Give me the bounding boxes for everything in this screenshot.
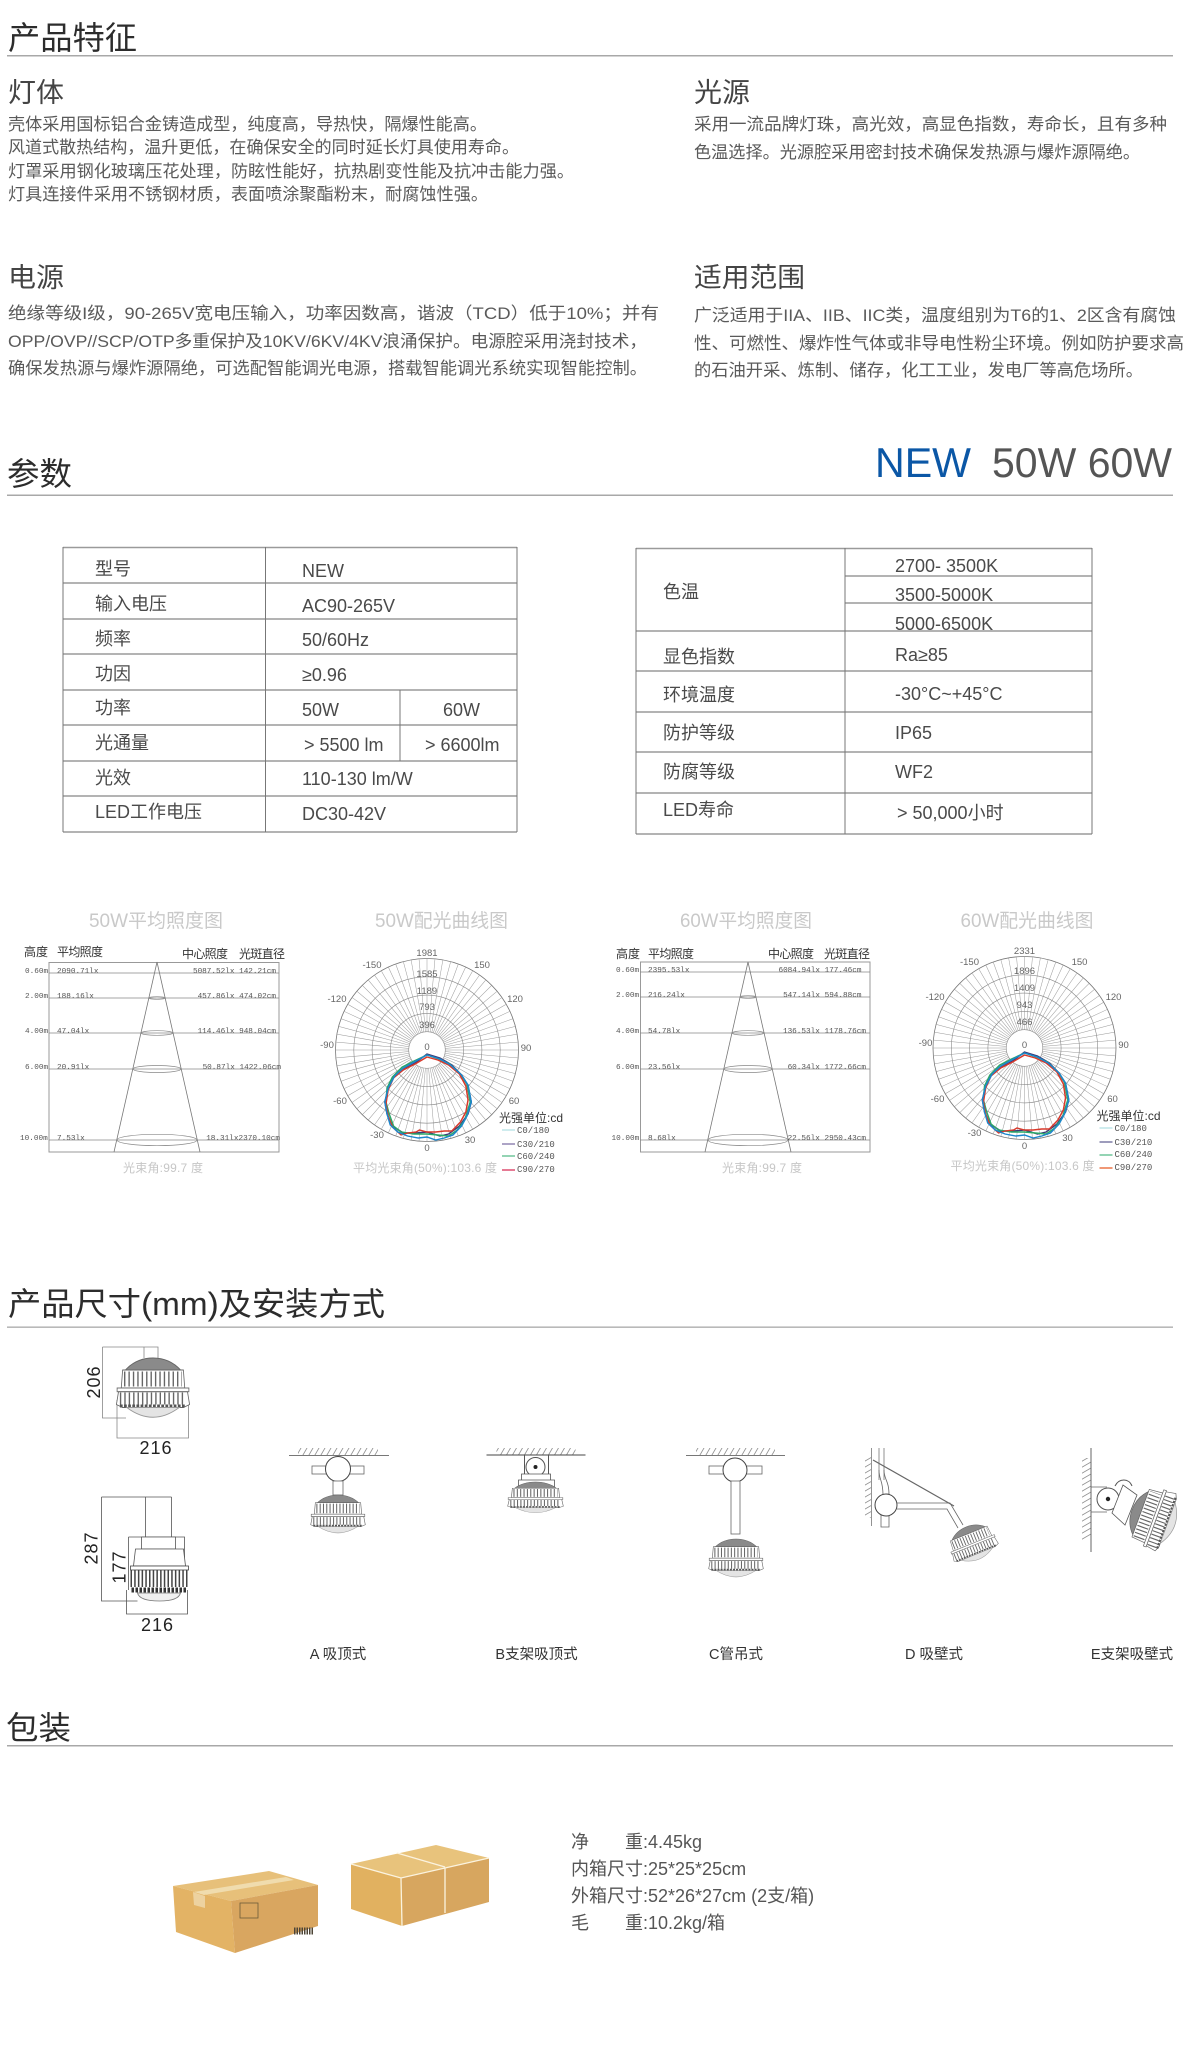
chart: 50W average illuminance <box>20 910 285 1175</box>
chart: 60W light distribution curve <box>919 910 1161 1173</box>
chart: 50W average illuminance: 7.53lx <box>57 1135 85 1143</box>
table: right parameters: 2700- 3500K <box>895 556 998 576</box>
text block: light source: 采用一流品牌灯珠，高光效，高显色指数，寿命长，且有多种 <box>694 115 1167 134</box>
installation A: ceiling mount: A 吸顶式 <box>310 1646 367 1663</box>
text block: lamp body: 壳体采用国标铝合金铸造成型，纯度高，导热快，隔爆性能高。 <box>8 115 487 134</box>
table: left parameters: LED工作电压 <box>95 802 202 822</box>
text block: packaging specifications: 重:4.45kg <box>625 1832 702 1852</box>
chart: 50W average illuminance: 188.16lx <box>57 993 94 1001</box>
chart: 50W light distribution curve: -30 <box>370 1130 384 1141</box>
chart: 60W light distribution curve: 150 <box>1072 957 1087 968</box>
chart: 60W light distribution curve: C90/270 <box>1114 1163 1152 1173</box>
table: left parameters: 50W <box>302 700 339 720</box>
chart: 60W light distribution curve: -120 <box>925 992 945 1003</box>
text block: packaging specifications <box>571 1832 814 1933</box>
icon: sealed cardboard box <box>351 1845 489 1926</box>
table: right parameters: 3500-5000K <box>895 585 993 605</box>
chart: 50W light distribution curve: 60 <box>509 1096 519 1107</box>
chart: 50W average illuminance: 2.00m <box>25 993 48 1001</box>
chart: 60W average illuminance: 60.34lx 1772.66cm <box>788 1064 866 1072</box>
dimension drawing: pendant lamp 287 x 177 x 216: 216 <box>141 1615 174 1635</box>
chart: 50W average illuminance: 10.00m <box>20 1135 48 1143</box>
text block: packaging specifications: 内箱尺寸:25*25*25cm <box>571 1859 746 1879</box>
table: right parameters: 环境温度 <box>663 685 735 705</box>
installation A: ceiling mount <box>289 1448 389 1663</box>
chart: 60W light distribution curve: 平均光束角(50%):103.6 度 <box>950 1158 1094 1173</box>
chart: 50W average illuminance: 18.31lx2370.10cm <box>206 1135 280 1143</box>
installation E: bracket wall mount: E支架吸壁式 <box>1091 1646 1174 1663</box>
chart: 60W average illuminance: 光束角:99.7 度 <box>722 1160 802 1175</box>
chart: 60W average illuminance <box>612 910 870 1175</box>
table: left parameters: ≥0.96 <box>302 665 347 685</box>
chart: 50W light distribution curve: -90 <box>320 1040 334 1051</box>
chart: 60W average illuminance: 4.00m <box>616 1028 639 1036</box>
chart: 50W average illuminance: 光斑直径 <box>239 947 285 961</box>
chart: 50W light distribution curve: C90/270 <box>517 1165 555 1175</box>
table: right parameters: 色温 <box>663 582 699 602</box>
dimension drawing: ceiling lamp 206 x 216 <box>84 1347 190 1458</box>
chart: 60W average illuminance: 547.14lx 594.88cm <box>783 992 862 1000</box>
table: right parameters: 防腐等级 <box>663 762 735 782</box>
chart: 60W light distribution curve: 0 <box>1022 1141 1027 1152</box>
icon: cardboard box with tape <box>173 1871 318 1953</box>
chart: 60W average illuminance: 54.78lx <box>648 1028 681 1036</box>
chart: 50W average illuminance: 2090.71lx <box>57 968 99 976</box>
chart: 60W average illuminance: 中心照度 <box>768 946 814 961</box>
text block: lamp body: 灯体 <box>8 78 64 108</box>
chart: 50W light distribution curve: 150 <box>474 960 490 971</box>
chart: 60W average illuminance: 10.00m <box>612 1135 640 1143</box>
chart: 60W light distribution curve: -60 <box>931 1094 944 1105</box>
table: left parameters: 110-130 lm/W <box>302 769 413 789</box>
chart: 60W average illuminance: 60W平均照度图 <box>680 910 812 932</box>
model label: NEW: NEW <box>875 439 971 486</box>
table: left parameters: 功因 <box>95 664 131 684</box>
text block: lamp body <box>8 78 574 204</box>
chart: 50W average illuminance: 457.86lx 474.02cm <box>198 993 276 1001</box>
chart: 60W light distribution curve: 30 <box>1062 1133 1073 1144</box>
chart: 50W average illuminance: 高度 <box>24 944 48 959</box>
installation D: wall mount <box>865 1448 1001 1663</box>
table: right parameters: 防护等级 <box>663 723 735 743</box>
table: right parameters <box>636 548 1092 834</box>
text block: power supply: 确保发热源与爆炸源隔绝，可选配智能调光电源，搭载智能调光系统实现智能控制。 <box>8 359 647 378</box>
chart: 60W light distribution curve: 60W配光曲线图 <box>960 910 1094 932</box>
chart: 50W light distribution curve: -150 <box>362 960 382 971</box>
table: right parameters: WF2 <box>895 762 933 782</box>
chart: 60W light distribution curve: -90 <box>919 1038 932 1049</box>
chart: 60W light distribution curve: 466 <box>1017 1017 1032 1028</box>
chart: 50W light distribution curve: C0/180 <box>517 1126 549 1136</box>
chart: 50W average illuminance: 平均照度 <box>57 944 103 959</box>
chart: 60W average illuminance: 平均照度 <box>648 946 694 961</box>
chart: 60W light distribution curve: 1896 <box>1014 966 1035 977</box>
chart: 50W average illuminance: 4.00m <box>25 1028 48 1036</box>
text block: application scope: 广泛适用于IIA、IIB、IIC类，温度组别为T6的1、2区含有腐蚀 <box>694 306 1176 325</box>
text block: light source <box>694 78 1167 162</box>
chart: 60W light distribution curve: -150 <box>960 957 979 968</box>
chart: 50W light distribution curve: -120 <box>327 994 347 1005</box>
chart: 50W light distribution curve: 1189 <box>417 986 437 997</box>
chart: 60W average illuminance: 22.56lx 2950.43cm <box>788 1135 866 1143</box>
table: left parameters: 光通量 <box>95 733 149 753</box>
chart: 60W light distribution curve: 60 <box>1107 1094 1118 1105</box>
heading: packaging: 包装 <box>6 1710 71 1746</box>
chart: 60W light distribution curve: 90 <box>1118 1040 1129 1051</box>
dimension drawing: ceiling lamp 206 x 216: 206 <box>84 1365 104 1399</box>
heading: parameters: 参数 <box>7 456 72 492</box>
text block: application scope: 性、可燃性、爆炸性气体或非导电性粉尘环境。例如防护要求高 <box>694 334 1184 353</box>
table: left parameters: 功率 <box>95 698 131 718</box>
table: right parameters: Ra≥85 <box>895 645 948 665</box>
chart: 50W average illuminance: 50W平均照度图 <box>89 910 223 932</box>
chart: 60W light distribution curve: 120 <box>1106 992 1121 1003</box>
dimension drawing: pendant lamp 287 x 177 x 216: 287 <box>82 1531 102 1565</box>
chart: 60W light distribution curve: 1409 <box>1014 983 1035 994</box>
chart: 60W average illuminance: 高度 <box>616 946 640 961</box>
chart: 50W average illuminance: 中心照度 <box>182 946 228 961</box>
table: left parameters: 50/60Hz <box>302 630 369 650</box>
installation B: bracket ceiling mount <box>486 1448 586 1663</box>
section: parameters <box>7 439 1173 834</box>
table: left parameters: NEW <box>302 561 344 581</box>
text block: power supply <box>8 263 659 378</box>
text block: lamp body: 灯具连接件采用不锈钢材质，表面喷涂聚酯粉末，耐腐蚀性强。 <box>8 185 488 204</box>
text block: packaging specifications: 毛 <box>571 1913 589 1933</box>
chart: 60W average illuminance: 6084.94lx 177.46cm <box>778 967 862 975</box>
chart: 50W average illuminance: 50.87lx 1422.06cm <box>203 1064 281 1072</box>
text block: application scope <box>694 263 1184 380</box>
chart: 60W light distribution curve: C0/180 <box>1114 1124 1147 1134</box>
chart: 50W average illuminance: 20.91lx <box>57 1064 90 1072</box>
text block: power supply: 电源 <box>8 263 64 293</box>
installation E: bracket wall mount <box>1082 1448 1185 1663</box>
installation B: bracket ceiling mount: B支架吸顶式 <box>495 1646 578 1663</box>
installation C: pipe pendant <box>686 1448 785 1663</box>
chart: 50W light distribution curve <box>320 910 563 1175</box>
text block: lamp body: 灯罩采用钢化玻璃压花处理，防眩性能好，抗热剧变性能及抗冲击能力强。 <box>8 162 574 181</box>
section: product features <box>7 20 1184 380</box>
chart: 50W light distribution curve: 120 <box>507 994 523 1005</box>
chart: 50W average illuminance: 114.46lx 948.04cm <box>198 1028 276 1036</box>
chart: 50W light distribution curve: 396 <box>419 1020 435 1031</box>
chart: 50W light distribution curve: 30 <box>465 1135 475 1146</box>
chart: 50W average illuminance: 光束角:99.7 度 <box>123 1160 203 1175</box>
chart: 60W light distribution curve: 光强单位:cd <box>1096 1108 1161 1123</box>
text block: lamp body: 风道式散热结构，温升更低，在确保安全的同时延长灯具使用寿命。 <box>8 137 519 157</box>
chart: 50W light distribution curve: 光强单位:cd <box>499 1110 563 1125</box>
table: left parameters: 输入电压 <box>95 594 167 614</box>
chart: 60W light distribution curve: 0 <box>1022 1040 1027 1051</box>
text block: power supply: OPP/OVP//SCP/OTP多重保护及10KV/6KV/4KV浪涌保护。电源腔采用浇封技术， <box>8 332 647 351</box>
text block: power supply: 绝缘等级I级，90-265V宽电压输入，功率因数高，谐波（TCD）低于10%；并有 <box>8 304 659 323</box>
chart: 60W average illuminance: 23.56lx <box>648 1064 681 1072</box>
chart: 60W light distribution curve: -30 <box>968 1128 981 1139</box>
heading: product features: 产品特征 <box>8 20 137 56</box>
section: dimensions and installation <box>7 1286 1185 1663</box>
chart: 60W light distribution curve: C60/240 <box>1114 1150 1152 1160</box>
chart: 60W average illuminance: 2395.53lx <box>648 967 690 975</box>
table: right parameters: 5000-6500K <box>895 614 993 634</box>
text block: packaging specifications: 净 <box>571 1832 589 1852</box>
section: packaging <box>6 1710 1173 1953</box>
table: right parameters: LED寿命 <box>663 800 734 820</box>
chart: 50W light distribution curve: 793 <box>419 1002 435 1013</box>
dimension drawing: ceiling lamp 206 x 216: 216 <box>139 1438 173 1458</box>
table: left parameters: > 5500 lm <box>304 735 384 755</box>
chart: 50W average illuminance: 5087.52lx 142.21cm <box>193 968 276 976</box>
table: right parameters: IP65 <box>895 723 932 743</box>
chart: 50W average illuminance: 0.60m <box>25 968 48 976</box>
chart: 50W light distribution curve: 1585 <box>416 969 438 980</box>
chart: 50W average illuminance: 6.00m <box>25 1064 48 1072</box>
table: right parameters: > 50,000小时 <box>897 803 1004 823</box>
text block: light source: 光源 <box>694 78 750 108</box>
chart: 50W average illuminance: 47.04lx <box>57 1028 90 1036</box>
chart: 60W average illuminance: 0.60m <box>616 967 639 975</box>
chart: 60W light distribution curve: C30/210 <box>1114 1138 1152 1148</box>
chart: 50W light distribution curve: 0 <box>424 1143 430 1154</box>
chart: 50W light distribution curve: C60/240 <box>517 1152 555 1162</box>
installation C: pipe pendant: C管吊式 <box>709 1646 763 1663</box>
table: right parameters: -30°C~+45°C <box>895 684 1002 704</box>
text block: light source: 色温选择。光源腔采用密封技术确保发热源与爆炸源隔绝。 <box>694 143 1140 162</box>
chart: 60W average illuminance: 136.53lx 1178.76cm <box>783 1028 866 1036</box>
chart: 60W average illuminance: 8.68lx <box>648 1135 676 1143</box>
chart: 60W light distribution curve: 2331 <box>1014 946 1035 957</box>
text block: packaging specifications: 外箱尺寸:52*26*27cm (2支/箱) <box>571 1886 814 1906</box>
dimension drawing: pendant lamp 287 x 177 x 216 <box>82 1497 188 1635</box>
text block: packaging specifications: 重:10.2kg/箱 <box>625 1913 725 1933</box>
table: right parameters: 显色指数 <box>663 647 735 667</box>
chart: 60W average illuminance: 光斑直径 <box>824 947 870 961</box>
table: left parameters: 型号 <box>95 559 131 579</box>
power label: 50W 60W: 50W 60W <box>992 439 1172 486</box>
chart: 50W light distribution curve: 1981 <box>416 948 438 959</box>
table: left parameters <box>63 547 517 832</box>
chart: 50W light distribution curve: 0 <box>424 1042 430 1053</box>
dimension drawing: pendant lamp 287 x 177 x 216: 177 <box>110 1550 130 1584</box>
installation D: wall mount: D 吸壁式 <box>905 1646 963 1663</box>
table: left parameters: 60W <box>443 700 480 720</box>
chart: 50W light distribution curve: C30/210 <box>517 1140 555 1150</box>
heading: dimensions and installation: 产品尺寸(mm)及安装方式 <box>8 1286 385 1322</box>
chart: 50W light distribution curve: 50W配光曲线图 <box>375 910 508 932</box>
chart: 60W average illuminance: 6.00m <box>616 1064 639 1072</box>
chart: 50W light distribution curve: -60 <box>333 1096 347 1107</box>
chart: 50W light distribution curve: 90 <box>521 1043 531 1054</box>
table: left parameters: 光效 <box>95 768 131 788</box>
chart: 50W light distribution curve: 平均光束角(50%):103.6 度 <box>353 1160 497 1175</box>
text block: application scope: 的石油开采、炼制、储存，化工工业，发电厂等高危场所。 <box>694 361 1143 380</box>
table: left parameters: 频率 <box>95 629 131 649</box>
chart: 60W average illuminance: 216.24lx <box>648 992 685 1000</box>
text block: application scope: 适用范围 <box>694 263 805 293</box>
chart: 60W light distribution curve: 943 <box>1017 1000 1032 1011</box>
table: left parameters: DC30-42V <box>302 804 386 824</box>
chart: 60W average illuminance: 2.00m <box>616 992 639 1000</box>
table: left parameters: > 6600lm <box>425 735 500 755</box>
table: left parameters: AC90-265V <box>302 596 395 616</box>
